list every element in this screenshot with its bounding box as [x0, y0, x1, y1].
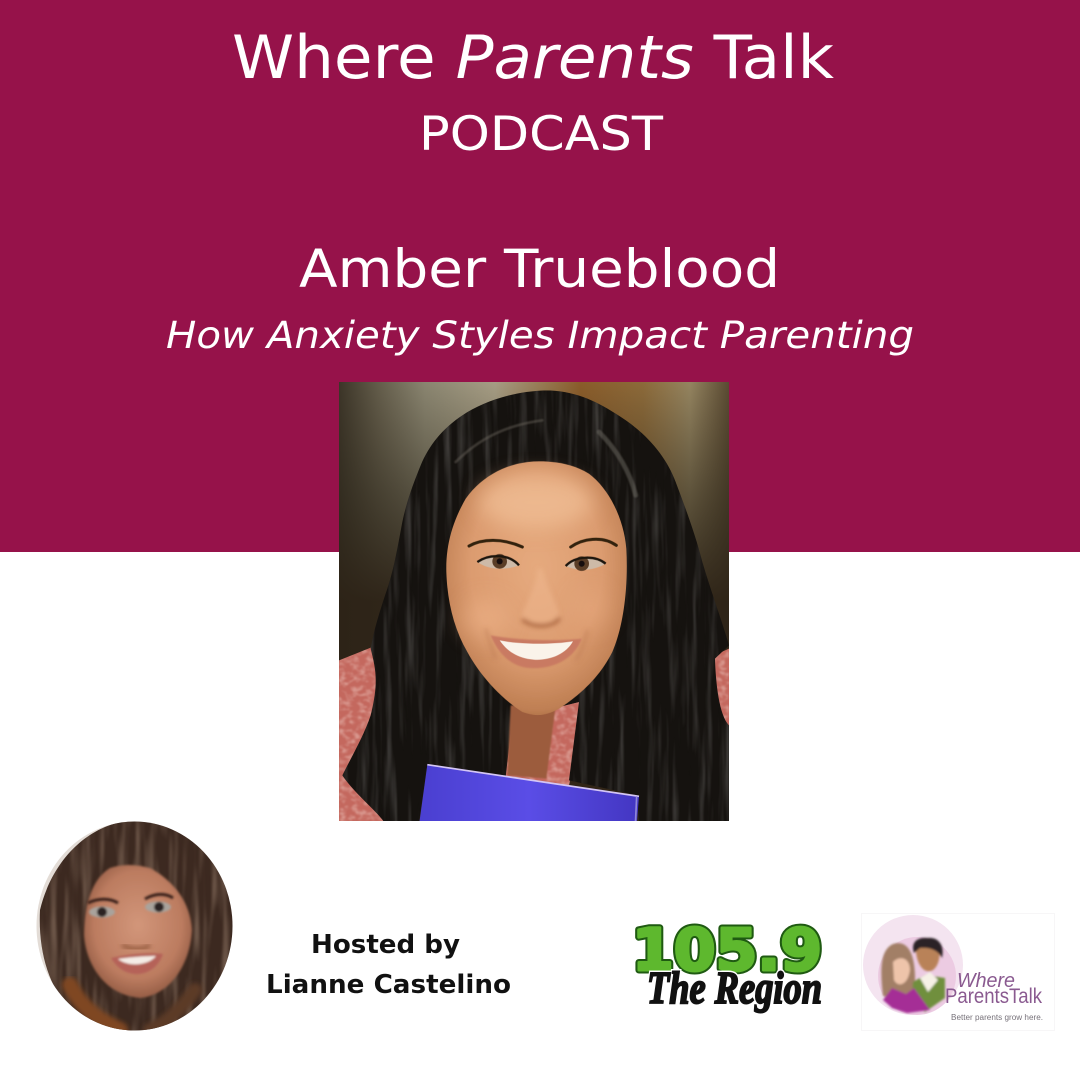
host eyes and brows — [88, 894, 173, 918]
logo: Where Parents Talk: ParentsTalk — [945, 985, 1042, 1008]
smile — [491, 635, 582, 668]
host smile — [111, 953, 163, 974]
cheek and forehead light — [462, 475, 609, 639]
subtitle: PODCAST: PODCAST — [419, 107, 663, 162]
photo background — [339, 382, 729, 821]
eyebrows — [469, 539, 616, 547]
host face — [84, 865, 192, 998]
episode title: How Anxiety Styles Impact Parenting — [166, 314, 914, 357]
hosted by text: Hosted by — [311, 930, 460, 960]
eyes — [477, 554, 606, 571]
hair — [339, 382, 729, 825]
host photo — [36, 822, 232, 1030]
sweater — [339, 642, 729, 825]
neck — [507, 705, 556, 779]
logo: Where Parents Talk — [862, 914, 1054, 1030]
logo wordmark: Where — [957, 970, 1015, 992]
logo circle — [863, 915, 963, 1015]
logo: 105.9 The Region: The Region — [647, 962, 822, 1013]
logo couple — [881, 938, 945, 1013]
logo: 105.9 The Region — [632, 916, 822, 1013]
maroon header band — [0, 0, 1080, 552]
nose — [485, 574, 588, 655]
host nose — [122, 945, 150, 949]
logo: 105.9 The Region: The Region — [647, 962, 822, 1013]
title: Where Parents Talk: Where Parents Talk — [232, 23, 834, 93]
logo: 105.9 The Region: 105.9 — [632, 916, 822, 984]
logo: Where Parents Talk: Better parents grow here. — [951, 1013, 1043, 1022]
book — [419, 765, 639, 825]
host hair — [40, 822, 232, 1030]
host name: Lianne Castelino — [266, 970, 511, 1000]
face — [446, 461, 627, 715]
guest name: Amber Trueblood — [299, 239, 780, 300]
logo: 105.9 The Region: 105.9 — [632, 916, 822, 984]
guest photo — [339, 382, 729, 825]
